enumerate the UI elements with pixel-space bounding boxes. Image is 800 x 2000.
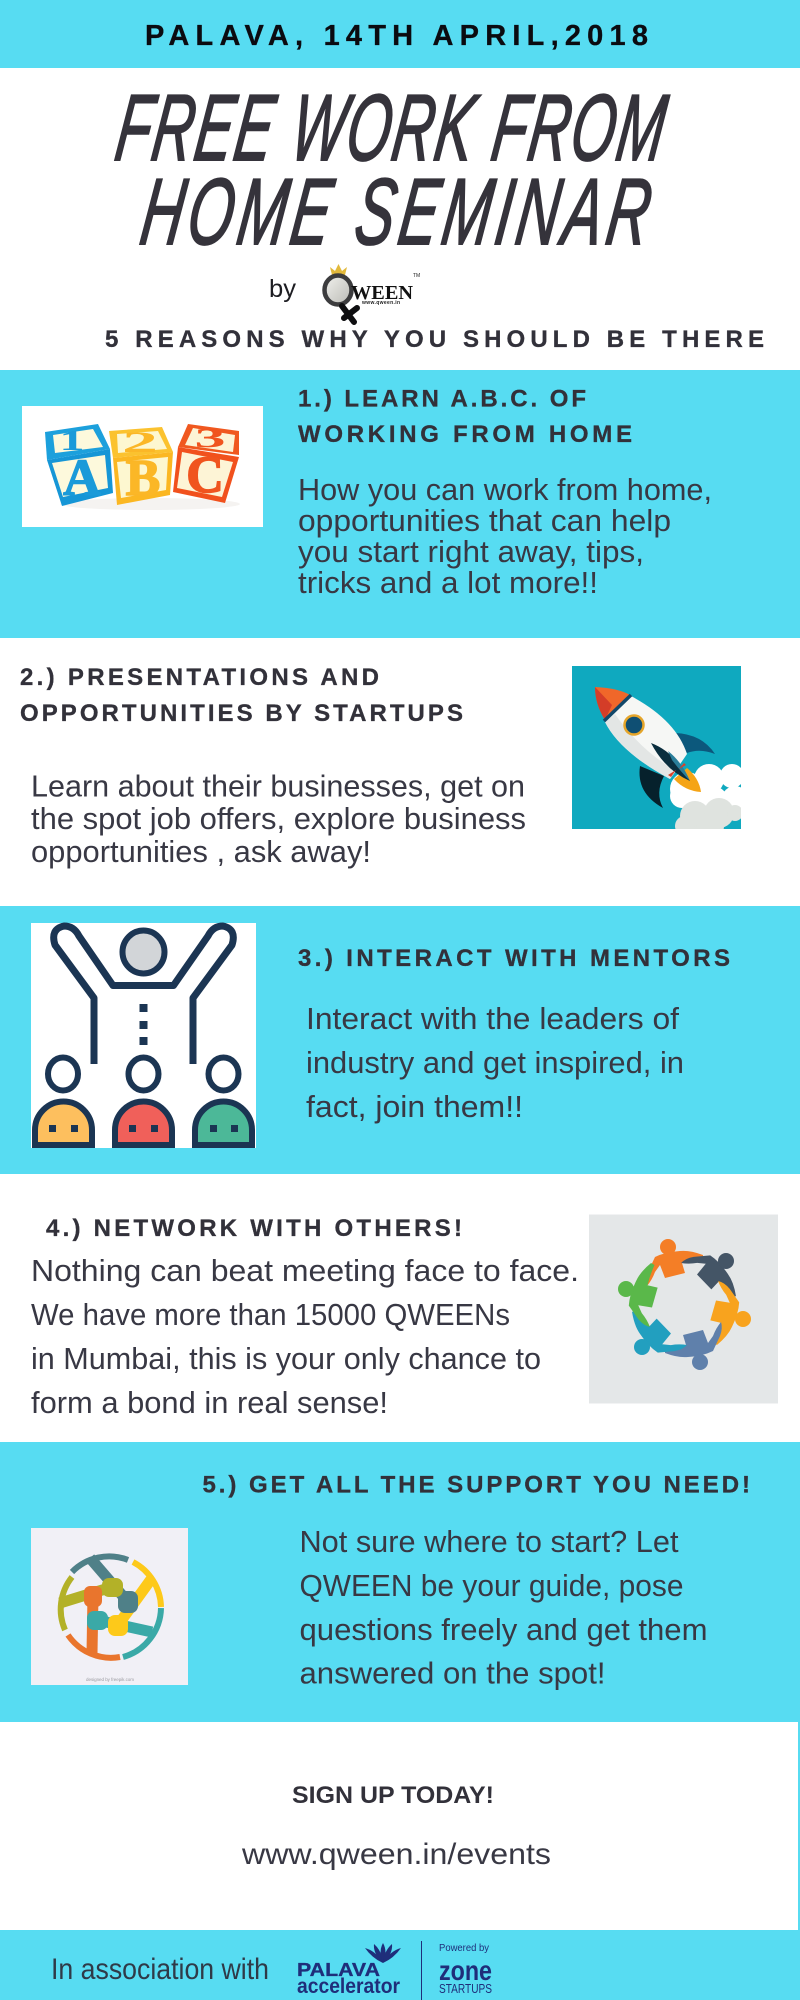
text: reason 2: opportunities , ask away!: [31, 835, 371, 869]
heading: reason 1: 1.) LEARN A.B.C. OF: [298, 386, 586, 412]
title: HOME SEMINAR: [135, 159, 658, 264]
text: reason 5: answered on the spot!: [300, 1656, 606, 1690]
right edge strip: [798, 1722, 800, 1930]
image: ABC blocks: A: [63, 450, 101, 507]
heading: reason 2: [20, 664, 463, 727]
logo: Zone Startups: [439, 1943, 492, 1996]
footer text: In association with: [51, 1953, 269, 1986]
heading: reason 3: 3.) INTERACT WITH MENTORS: [298, 945, 730, 972]
footer: partners: [0, 1930, 800, 2000]
logo: Zone Startups: Powered by: [439, 1943, 489, 1954]
text: reason 4: Nothing can beat meeting face to face.: [31, 1254, 579, 1288]
panel: reason 4: [31, 1214, 778, 1420]
text: reason 2: Learn about their businesses, get on: [31, 770, 525, 804]
panel: reason 3: [0, 906, 800, 1174]
text: reason 3: fact, join them!!: [306, 1090, 523, 1124]
panel: reason 5: [0, 1442, 800, 1722]
image: ABC blocks: [22, 406, 263, 527]
text: reason 1: you start right away, tips,: [298, 535, 644, 569]
heading: reason 5: 5.) GET ALL THE SUPPORT YOU NEED!: [202, 1472, 750, 1498]
heading: reason 4: 4.) NETWORK WITH OTHERS!: [46, 1215, 462, 1242]
text: reason 5: QWEEN be your guide, pose: [300, 1569, 684, 1603]
heading: reason 1: [298, 386, 632, 448]
text: reason 4: [31, 1254, 579, 1420]
title: FREE WORK FROM: [110, 75, 674, 180]
logo: Palava accelerator: accelerator: [297, 1975, 400, 1998]
text: reason 1: How you can work from home,: [298, 473, 712, 507]
heading: reason 1: WORKING FROM HOME: [298, 421, 632, 448]
logo: Palava accelerator: [297, 1943, 401, 1998]
subheading: five reasons: 5 REASONS WHY YOU SHOULD BE THERE: [105, 326, 764, 353]
text: reason 2: the spot job offers, explore business: [31, 802, 526, 836]
panel: reason 2: [20, 664, 748, 869]
image: ABC blocks: 1: [59, 425, 85, 456]
title: [110, 75, 674, 264]
text: reason 3: [306, 1002, 684, 1124]
top banner: date and place: [0, 0, 800, 68]
image: ABC blocks: 2: [122, 425, 158, 459]
text: reason 1: tricks and a lot more!!: [298, 566, 598, 600]
text: reason 5: [300, 1525, 708, 1690]
top banner: date and place: PALAVA, 14TH APRIL,2018: [145, 20, 648, 52]
text: reason 3: industry and get inspired, in: [306, 1046, 684, 1080]
image: joined hands circle: [31, 1528, 188, 1685]
panel: reason 1: [0, 370, 800, 638]
logo: Palava accelerator: PALAVA: [297, 1960, 380, 1980]
image: joined hands circle: designed by freepik.com: [86, 1677, 134, 1682]
logo: QWEEN: TM: [413, 273, 420, 279]
call to action link: www.qween.in/events: [241, 1838, 551, 1871]
text: reason 5: Not sure where to start? Let: [300, 1525, 679, 1559]
image: ABC blocks: 3: [194, 423, 226, 453]
text: reason 3: Interact with the leaders of: [306, 1002, 680, 1036]
byline text: by: [269, 275, 297, 303]
text: reason 4: in Mumbai, this is your only chance to: [31, 1342, 541, 1376]
logo: Zone Startups: zone: [439, 1955, 492, 1986]
text: reason 2: [31, 770, 526, 869]
text: reason 1: [298, 473, 712, 600]
heading: reason 2: OPPORTUNITIES BY STARTUPS: [20, 700, 463, 727]
heading: reason 2: 2.) PRESENTATIONS AND: [20, 664, 379, 691]
logo: QWEEN: www.qween.in: [361, 300, 400, 306]
call to action heading: SIGN UP TODAY!: [292, 1782, 494, 1809]
logo: QWEEN: [324, 264, 420, 322]
image: mentor and mentees icon: [31, 923, 256, 1148]
image: ABC blocks: B: [126, 450, 160, 507]
text: reason 1: opportunities that can help: [298, 504, 671, 538]
text: reason 4: We have more than 15000 QWEENs: [31, 1298, 510, 1332]
logo: QWEEN: WEEN: [351, 282, 414, 304]
image: ring of people: [589, 1214, 778, 1404]
image: ABC blocks: C: [186, 447, 224, 504]
divider line: [421, 1941, 422, 2000]
logo: Zone Startups: STARTUPS: [439, 1981, 492, 1996]
text: reason 5: questions freely and get them: [300, 1613, 708, 1647]
image: rocket: [572, 666, 741, 829]
text: reason 4: form a bond in real sense!: [31, 1386, 388, 1420]
